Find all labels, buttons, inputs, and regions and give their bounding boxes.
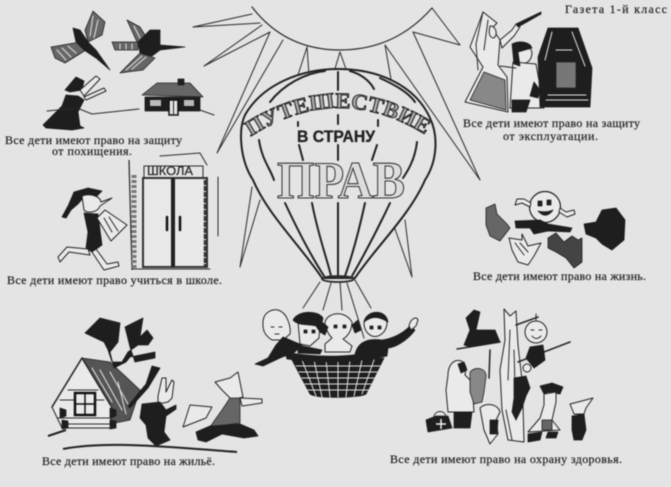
caption: health: Все дети имеют право на охрану здоровья.: [390, 452, 622, 466]
caption: protection from exploitation: от эксплуатации.: [503, 129, 598, 143]
ropes: [303, 280, 371, 338]
caption: protection from abduction: от похищения.: [52, 144, 132, 158]
icon: wolf: [509, 234, 541, 265]
icon: piglet: [480, 405, 500, 444]
icon: girl with hat: [528, 383, 563, 442]
icon: goose left: [51, 11, 110, 70]
school door: [129, 153, 218, 270]
icon: child patient: [470, 369, 486, 404]
icon: child at stove: [500, 42, 544, 112]
icon: middle child: [512, 376, 530, 420]
boy with book: [58, 188, 127, 270]
neck ring: [322, 276, 354, 282]
icon: tree: [457, 309, 570, 442]
school door: ШКОЛА: [147, 164, 193, 178]
title: В СТРАНУ: В СТРАНУ: [297, 128, 376, 146]
caption: protection from exploitation: Все дети имеют право на защиту: [463, 116, 640, 130]
caption: school: Все дети имеют право учиться в школе.: [7, 273, 222, 287]
icon: bear: [584, 208, 625, 250]
icon: left animal: [486, 204, 510, 241]
caption: protection from exploitation: [463, 116, 640, 143]
icon: bag: [426, 412, 452, 432]
icon: stepmother: [465, 12, 541, 112]
page label: Газета 1-й класс: [565, 2, 667, 16]
envelope seams: [259, 71, 417, 276]
icon: hare: [128, 366, 176, 446]
icon: log house: [48, 358, 237, 452]
icon: onion head: [523, 314, 547, 372]
caption: protection from abduction: [5, 133, 182, 158]
icon: little pig: [570, 398, 593, 440]
caption: protection from abduction: Все дети имеют право на защиту: [5, 133, 182, 147]
icon: stove: [538, 28, 592, 107]
child: blonde girl: [263, 310, 290, 340]
school with running boy: [58, 153, 218, 270]
top left: geese stealing a child: [43, 11, 214, 130]
hot-air balloon: [241, 69, 435, 338]
icon: fox: [183, 372, 262, 442]
icon: rooster: [85, 318, 155, 368]
icon: round face: [515, 192, 575, 234]
icon: goose right: [112, 20, 185, 73]
title: ПРАВ: ПРАВ: [277, 152, 405, 210]
icon: top left animal: [464, 310, 500, 347]
child: boy in cap: [298, 322, 320, 346]
balloon envelope: [241, 69, 435, 278]
child: girl with bows: [325, 314, 352, 352]
title: ПУТЕШЕСТВИЕ: ПУТЕШЕСТВИЕ: [242, 92, 432, 138]
sun with rays: [193, 7, 480, 277]
caption: life: Все дети имеют право на жизнь.: [473, 269, 646, 283]
right middle: Kolobok and animals: [486, 192, 625, 268]
icon: cottage: [142, 79, 203, 115]
icon: running child: [43, 76, 214, 130]
icon: lower hare: [548, 233, 582, 268]
lower right: tree with doctor and patients: [426, 309, 593, 444]
caption: housing: Все дети имеют право на жильё.: [42, 454, 215, 468]
icon: doctor: [446, 360, 474, 428]
log house with rooster, hare and fox: [48, 318, 262, 452]
basket: [292, 358, 384, 397]
top right: exploitation scene: [465, 12, 592, 112]
children in basket: [255, 310, 418, 397]
child: waving boy: [364, 314, 387, 336]
